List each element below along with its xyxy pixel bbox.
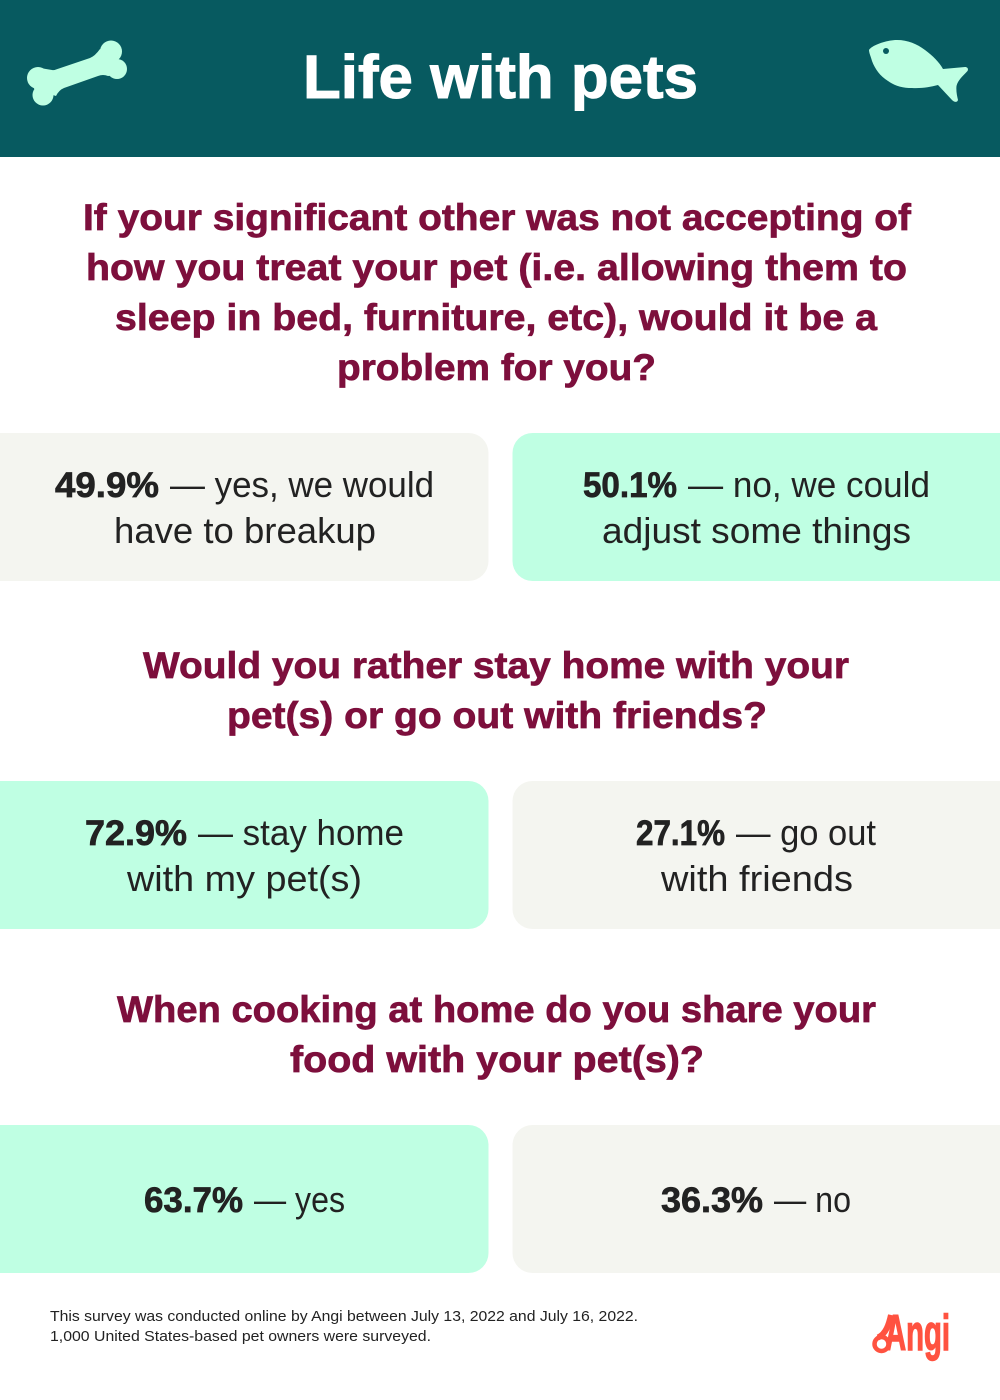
question 3 heading: food with your pet(s)? <box>290 1039 704 1080</box>
survey footnote: This survey was conducted online by Angi between July 13, 2022 and July 16, 2022. <box>50 1308 638 1325</box>
panel: 49.9% yes: 49.9% <box>55 466 159 505</box>
question 1 heading <box>83 197 912 388</box>
question 3 heading <box>117 989 876 1080</box>
panel: 72.9% stay home <box>0 781 488 929</box>
panel: 49.9% yes: — yes, we would <box>170 464 434 505</box>
Angi logo: Angi <box>885 1305 950 1361</box>
question 2 heading: pet(s) or go out with friends? <box>227 695 767 736</box>
panel: 49.9% yes: have to breakup <box>114 510 376 551</box>
panel: 50.1% no: — no, we could <box>688 464 930 505</box>
panel: 36.3% no: 36.3% <box>661 1181 763 1220</box>
panel: 63.7% yes: 63.7% <box>144 1181 243 1220</box>
Angi logo <box>874 1305 950 1361</box>
panel: 36.3% no: — no <box>774 1179 851 1220</box>
panel: 36.3% no <box>512 1125 1000 1273</box>
question 1 heading: how you treat your pet (i.e. allowing them to <box>86 247 907 288</box>
survey footnote <box>50 1308 638 1345</box>
survey footnote: 1,000 United States-based pet owners were surveyed. <box>50 1328 431 1345</box>
panel: 27.1% go out: — go out <box>736 812 876 853</box>
icon: fish <box>869 40 968 102</box>
panel: 63.7% yes <box>0 1125 488 1273</box>
panel: 50.1% no <box>512 433 1000 581</box>
panel: 27.1% go out: with friends <box>660 858 853 899</box>
panel: 72.9% stay home: — stay home <box>198 812 404 853</box>
question 2 heading: Would you rather stay home with your <box>143 645 849 686</box>
header banner <box>0 0 1000 157</box>
question 2 heading <box>143 645 849 736</box>
panel: 49.9% yes <box>0 433 488 581</box>
panel: 72.9% stay home: 72.9% <box>85 814 187 853</box>
panel: 27.1% go out <box>512 781 1000 929</box>
question 1 heading: problem for you? <box>337 347 656 388</box>
panel: 72.9% stay home: with my pet(s) <box>126 858 362 899</box>
panel: 50.1% no: 50.1% <box>583 466 677 505</box>
panel: 27.1% go out: 27.1% <box>636 814 725 853</box>
question 1 heading: sleep in bed, furniture, etc), would it be a <box>115 297 877 338</box>
icon: bone <box>27 40 127 106</box>
panel: 63.7% yes: — yes <box>254 1179 345 1220</box>
question 3 heading: When cooking at home do you share your <box>117 989 876 1030</box>
panel: 50.1% no: adjust some things <box>602 510 911 551</box>
title: Life with pets <box>303 43 698 111</box>
question 1 heading: If your significant other was not accepting of <box>83 197 912 238</box>
